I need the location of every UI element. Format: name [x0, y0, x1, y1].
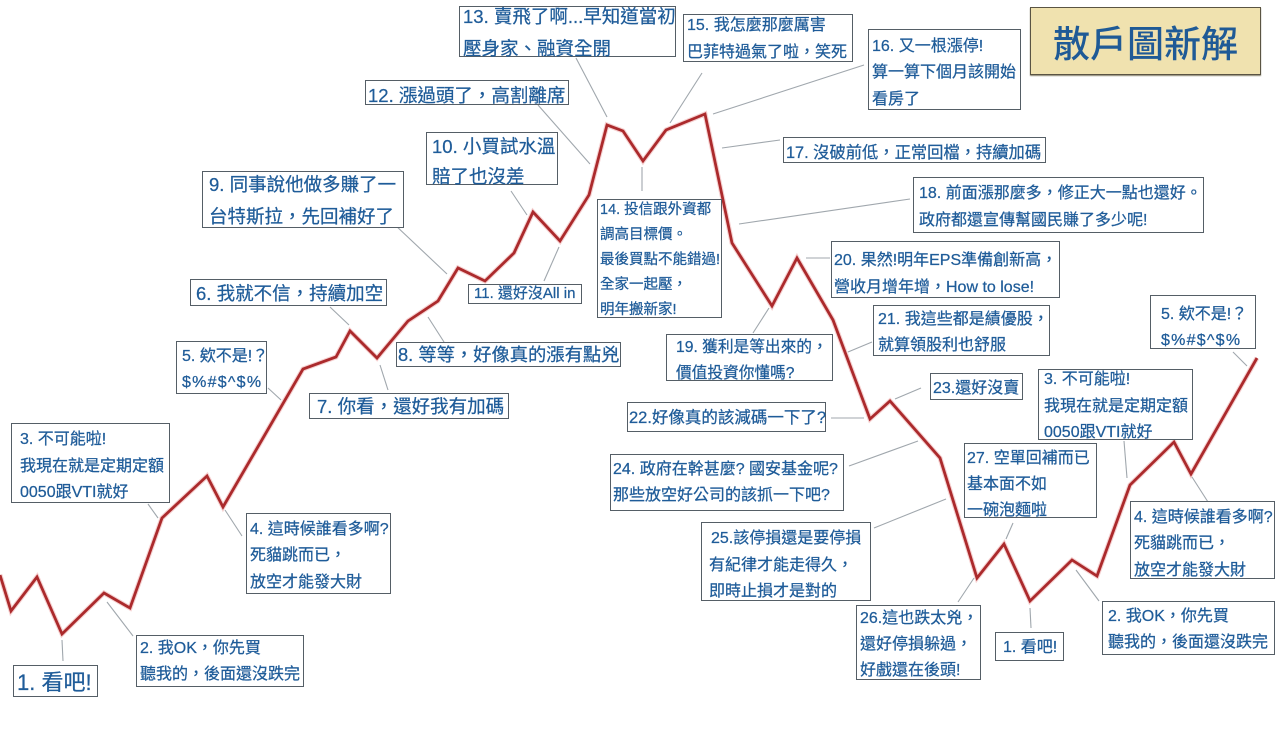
- callout 3 left: 我現在就是定期定額: [20, 458, 164, 475]
- callout 17: [783, 137, 1046, 163]
- callout 2 left: [136, 635, 304, 687]
- callout 23: [930, 373, 1023, 400]
- callout 6: 6. 我就不信，持續加空: [196, 283, 383, 304]
- callout 18: 18. 前面漲那麼多，修正大一點也還好。: [919, 185, 1202, 202]
- callout 18: [913, 177, 1204, 233]
- callout 16: 看房了: [872, 91, 920, 108]
- callout 5 right: 5. 欸不是!？: [1161, 306, 1247, 323]
- red price line glow: [0, 114, 1257, 634]
- callout 4 left: 放空才能發大財: [250, 574, 362, 591]
- callout 4 right: 4. 這時候誰看多啊?: [1134, 509, 1273, 526]
- callout 19: 價值投資你懂嗎?: [676, 364, 795, 382]
- callout 18: 政府都還宣傳幫國民賺了多少呢!: [919, 212, 1147, 229]
- callout 26: 好戲還在後頭!: [860, 662, 960, 678]
- callout 2 right: 聽我的，後面還沒跌完: [1108, 634, 1268, 651]
- callout 3 left: 0050跟VTI就好: [20, 484, 128, 501]
- callout 5 right: [1150, 295, 1256, 349]
- callout 25: 有紀律才能走得久，: [709, 557, 853, 574]
- callout 14: 明年搬新家!: [600, 302, 677, 318]
- callout 9: 9. 同事說他做多賺了一: [209, 174, 396, 195]
- callout 24: 24. 政府在幹甚麼? 國安基金呢?: [613, 460, 838, 478]
- callout 16: 算一算下個月該開始: [872, 64, 1016, 81]
- callout 1 left: 1. 看吧!: [17, 670, 92, 695]
- callout 13: [459, 6, 676, 57]
- callout 24: 那些放空好公司的該抓一下吧?: [613, 486, 830, 504]
- callout 19: 19. 獲利是等出來的，: [676, 338, 828, 356]
- callout 3 right: 3. 不可能啦!: [1044, 371, 1130, 388]
- callout 25: 25.該停損還是要停損: [711, 530, 861, 547]
- callout 1 left: [13, 665, 98, 697]
- callout 7: 7. 你看，還好我有加碼: [317, 396, 504, 417]
- callout 23: 23.還好沒賣: [933, 380, 1019, 396]
- callout 3 right: 我現在就是定期定額: [1044, 398, 1188, 415]
- callout 14: 全家一起壓，: [600, 277, 687, 293]
- callout 4 right: [1130, 501, 1275, 579]
- callout 10: 賠了也沒差: [432, 166, 525, 186]
- title: 散戶圖新解: [1053, 24, 1238, 65]
- callout 4 left: [246, 513, 391, 594]
- callout 16: 16. 又一根漲停!: [872, 38, 983, 55]
- callout 15: 巴菲特過氣了啦，笑死: [687, 44, 847, 60]
- callout 8: 8. 等等，好像真的漲有點兇: [398, 344, 619, 365]
- callout 27: [964, 443, 1097, 518]
- callout 2 left: 2. 我OK，你先買: [140, 640, 261, 657]
- callout 3 right: 0050跟VTI就好: [1044, 424, 1152, 441]
- callout 13: 壓身家、融資全開: [463, 38, 611, 59]
- callout 27: 一碗泡麵啦: [967, 502, 1047, 518]
- leader lines connecting callouts to the price line: [62, 58, 1247, 661]
- callout 26: 還好停損躲過，: [860, 636, 972, 652]
- callout 14: 最後買點不能錯過!: [600, 252, 720, 268]
- callout 20: 營收月增年增，How to lose!: [834, 278, 1034, 296]
- callout 14: 14. 投信跟外資都: [600, 202, 711, 218]
- callout 4 right: 死貓跳而已，: [1134, 535, 1230, 552]
- callout 9: 台特斯拉，先回補好了: [209, 206, 394, 227]
- callout 13: 13. 賣飛了啊...早知道當初: [463, 6, 676, 27]
- callout 16: [868, 29, 1021, 110]
- callout 26: [856, 605, 981, 680]
- callout 19: [666, 334, 833, 381]
- callout 4 right: 放空才能發大財: [1134, 562, 1246, 579]
- callout 9: [202, 171, 404, 228]
- callout 5 right: $%#$^$%: [1161, 332, 1241, 349]
- title: [1030, 7, 1261, 75]
- callout 25: 即時止損才是對的: [709, 583, 837, 600]
- callout 2 right: [1102, 601, 1275, 655]
- callout 1 right: 1. 看吧!: [1003, 639, 1057, 656]
- callout 15: 15. 我怎麼那麼厲害: [687, 17, 826, 34]
- callout 2 left: 聽我的，後面還沒跌完: [140, 666, 300, 683]
- callout 10: [426, 132, 558, 185]
- callout 14: [597, 199, 722, 318]
- callout 21: [873, 305, 1050, 356]
- callout 5 left: 5. 欸不是!？: [182, 348, 268, 364]
- callout 11: 11. 還好沒All in: [474, 285, 575, 302]
- callout 4 left: 死貓跳而已，: [250, 547, 346, 564]
- callout 22: [627, 402, 826, 432]
- callout 21: 就算領股利也舒服: [878, 336, 1006, 354]
- callout 26: 26.這也跌太兇，: [860, 610, 978, 626]
- callout 17: 17. 沒破前低，正常回檔，持續加碼: [786, 144, 1041, 162]
- callout 15: [683, 14, 853, 62]
- callout 4 left: 4. 這時候誰看多啊?: [250, 521, 389, 538]
- callout 3 left: [11, 423, 170, 503]
- callout 27: 基本面不如: [967, 476, 1047, 492]
- callout 20: [831, 241, 1060, 298]
- callout 5 left: [176, 341, 267, 394]
- callout 5 left: $%#$^$%: [182, 374, 262, 391]
- callout 25: [701, 522, 871, 601]
- callout 24: [610, 454, 844, 511]
- callout 27: 27. 空單回補而已: [967, 450, 1090, 466]
- callout 1 right: [995, 632, 1064, 661]
- callout 2 right: 2. 我OK，你先買: [1108, 608, 1229, 625]
- callout 20: 20. 果然!明年EPS準備創新高，: [834, 252, 1057, 268]
- red price line: [0, 114, 1257, 634]
- callout 14: 調高目標價。: [600, 227, 687, 243]
- callout 3 left: 3. 不可能啦!: [20, 431, 106, 448]
- callout 12: 12. 漲過頭了，高割離席: [368, 84, 565, 106]
- callout 22: 22.好像真的該減碼一下了?: [629, 409, 826, 427]
- callout 21: 21. 我這些都是績優股，: [878, 310, 1049, 328]
- callout 10: 10. 小買試水溫: [432, 136, 555, 156]
- callout 3 right: [1038, 369, 1193, 440]
